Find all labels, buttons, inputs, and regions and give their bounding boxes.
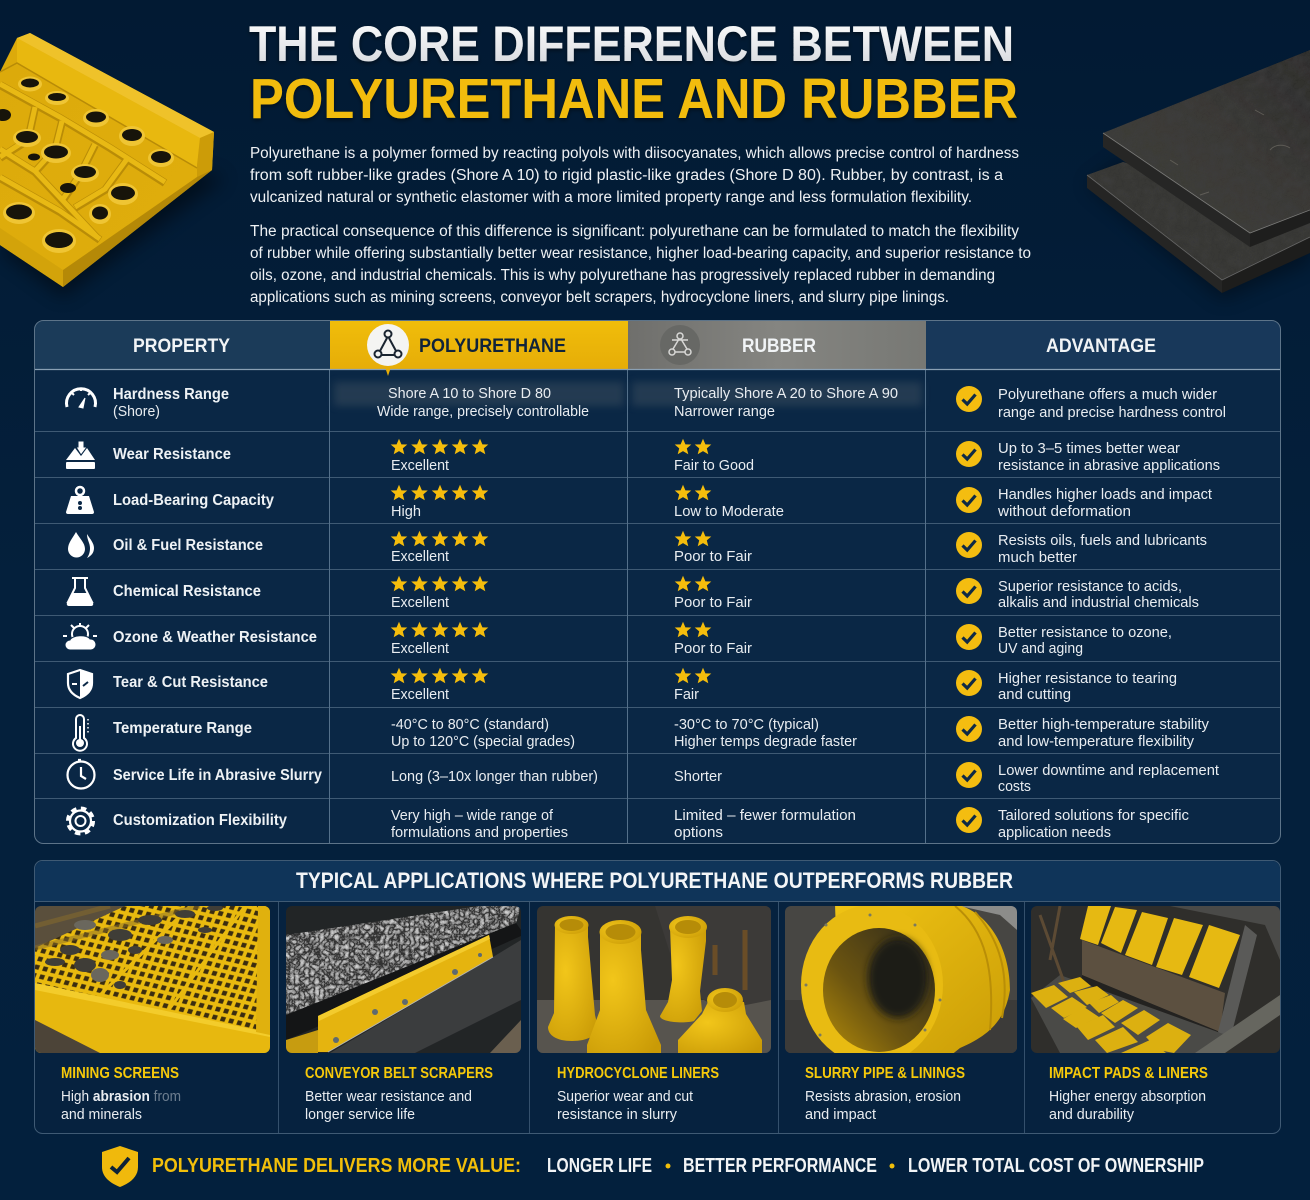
row: tear and cut resistance [68, 668, 1177, 703]
description: impact pads and liners: Higher energy absorption [1049, 1088, 1206, 1105]
row: tear and cut resistance: and cutting [998, 686, 1071, 703]
footer banner: POLYURETHANE DELIVERS MORE VALUE: [152, 1155, 521, 1177]
row: chemical resistance: Excellent [391, 594, 450, 611]
image: conveyor scraper [286, 906, 521, 1053]
row: ozone and weather resistance: UV and aging [998, 640, 1083, 657]
icon: clock [68, 760, 94, 788]
image: slurry pipe [785, 904, 1017, 1065]
row: temperature range: and low-temperature flexibility [998, 733, 1194, 750]
row: chemical resistance: Superior resistance to acids, [998, 578, 1182, 595]
row: tear and cut resistance: Tear & Cut Resistance [113, 674, 268, 691]
row: oil and fuel resistance: Excellent [391, 548, 450, 565]
row: service life in abrasive slurry: Shorter [674, 768, 722, 785]
row: chemical resistance: Chemical Resistance [113, 583, 261, 600]
row: hardness range: Hardness Range [113, 386, 229, 403]
footer banner [102, 1146, 1204, 1187]
image: mining screen [35, 905, 270, 1053]
row: customization flexibility: Very high – wide range of [391, 807, 554, 824]
row: oil and fuel resistance: Poor to Fair [674, 548, 752, 565]
table header row: RUBBER [742, 336, 816, 357]
description: impact pads and liners: and durability [1049, 1106, 1134, 1123]
text block: introduction paragraph one [250, 145, 1019, 206]
row: temperature range: -40°C to 80°C (standard) [391, 716, 549, 733]
row: load-bearing capacity: Load-Bearing Capacity [113, 492, 274, 509]
description: slurry pipe and linings: and impact [805, 1106, 877, 1123]
icon: thermometer [73, 715, 88, 751]
text block: introduction paragraph two: The practical consequence of this difference is significant: polyurethane can be formulated to match the flexibility [250, 223, 1019, 240]
icon: sun and cloud [63, 623, 97, 650]
table header row: POLYURETHANE [419, 336, 566, 357]
description: impact pads and liners [1049, 1088, 1206, 1123]
row: hardness range: range and precise hardness control [998, 404, 1226, 421]
row: chemical resistance: Poor to Fair [674, 594, 752, 611]
footer banner: BETTER PERFORMANCE [683, 1155, 877, 1177]
description: hydrocyclone liners: resistance in slurry [557, 1106, 677, 1123]
table header row: PROPERTY [133, 336, 230, 357]
row: oil and fuel resistance: Resists oils, fuels and lubricants [998, 532, 1207, 549]
text block: introduction paragraph one: Polyurethane is a polymer formed by reacting polyols with diisocyanates, which allows precise control of hardness [250, 145, 1019, 162]
row: service life in abrasive slurry: Long (3–10x longer than rubber) [391, 768, 598, 785]
row: wear resistance: Up to 3–5 times better wear [998, 440, 1180, 457]
row: service life in abrasive slurry: Lower downtime and replacement [998, 762, 1220, 779]
description: conveyor belt scrapers: Better wear resistance and [305, 1088, 472, 1105]
description: mining screens [61, 1088, 181, 1123]
row: hardness range: Polyurethane offers a much wider [998, 386, 1217, 403]
row: customization flexibility: Customization Flexibility [113, 812, 287, 829]
row: customization flexibility: Tailored solutions for specific [998, 807, 1189, 824]
row: load-bearing capacity: Handles higher loads and impact [998, 486, 1213, 503]
row: ozone and weather resistance: Ozone & Weather Resistance [113, 629, 317, 646]
row: oil and fuel resistance [68, 531, 1207, 566]
row: temperature range: Up to 120°C (special grades) [391, 733, 575, 750]
icon: gauge [66, 388, 96, 408]
description: conveyor belt scrapers [305, 1088, 472, 1123]
row: chemical resistance: alkalis and industrial chemicals [998, 594, 1199, 611]
row: wear resistance [66, 439, 1220, 474]
row: customization flexibility: Limited – fewer formulation [674, 807, 856, 824]
row: temperature range: Temperature Range [113, 720, 252, 737]
row: customization flexibility [68, 807, 1189, 841]
icon: gear [68, 808, 93, 834]
text block: introduction paragraph one: vulcanized natural or synthetic elastomer with a more limited property range and less formulation flexibility. [250, 189, 972, 206]
row: temperature range: Better high-temperature stability [998, 716, 1209, 733]
description: slurry pipe and linings [805, 1088, 961, 1123]
upper pads [1080, 906, 1240, 988]
row: wear resistance: Excellent [391, 457, 450, 474]
row: wear resistance: resistance in abrasive applications [998, 457, 1220, 474]
row: oil and fuel resistance: much better [998, 549, 1077, 566]
description: mining screens: and minerals [61, 1106, 142, 1123]
panel: comparison table [34, 320, 1281, 844]
row: service life in abrasive slurry [68, 760, 1220, 795]
row: oil and fuel resistance: Oil & Fuel Resistance [113, 537, 263, 554]
row: hardness range: (Shore) [113, 403, 160, 420]
footer banner: LONGER LIFE [547, 1155, 652, 1177]
row: wear resistance: Fair to Good [674, 457, 754, 474]
row: wear resistance: Wear Resistance [113, 446, 231, 463]
icon: flask [67, 578, 93, 606]
row: load-bearing capacity: Low to Moderate [674, 503, 784, 520]
row: customization flexibility: formulations and properties [391, 824, 568, 841]
description: hydrocyclone liners [557, 1088, 694, 1123]
text block: introduction paragraph two: oils, ozone, and industrial chemicals. This is why polyurethane has progressively replaced rubber in demanding [250, 267, 995, 284]
text block: introduction paragraph two [250, 223, 1031, 306]
row: temperature range: Higher temps degrade faster [674, 733, 857, 750]
row: service life in abrasive slurry: Service Life in Abrasive Slurry [113, 767, 322, 784]
icon: shield check [102, 1146, 138, 1187]
description: mining screens: High abrasion from [61, 1088, 181, 1105]
icon: polyurethane molecule [367, 324, 409, 376]
icon: shield [68, 670, 92, 698]
image: black rubber sheets [1087, 50, 1310, 300]
row: hardness range: Narrower range [674, 403, 775, 420]
row: hardness range: Typically Shore A 20 to Shore A 90 [674, 385, 898, 402]
label: impact pads and liners: IMPACT PADS & LINERS [1049, 1065, 1208, 1082]
applications heading: TYPICAL APPLICATIONS WHERE POLYURETHANE OUTPERFORMS RUBBER [296, 868, 1013, 893]
icon: oil drops [68, 532, 94, 558]
row: ozone and weather resistance: Better resistance to ozone, [998, 624, 1172, 641]
row: chemical resistance [67, 576, 1199, 611]
row: hardness range: Shore A 10 to Shore D 80 [388, 385, 551, 402]
card: mining screens [35, 905, 270, 1123]
table header row [34, 321, 1280, 370]
row: hardness range [66, 385, 1226, 421]
row: load-bearing capacity: High [391, 503, 421, 520]
table header row: ADVANTAGE [1046, 336, 1156, 357]
label: hydrocyclone liners: HYDROCYCLONE LINERS [557, 1065, 719, 1082]
description: conveyor belt scrapers: longer service life [305, 1106, 415, 1123]
title: THE CORE DIFFERENCE BETWEEN [249, 16, 1014, 72]
row: temperature range [73, 715, 1209, 751]
row: load-bearing capacity [66, 485, 1213, 520]
icon: weight [66, 487, 94, 514]
title [249, 16, 1018, 131]
text block: introduction paragraph two: applications such as mining screens, conveyor belt scrapers, hydrocyclone liners, and slurry pipe linings. [250, 289, 949, 306]
text block: introduction paragraph two: of rubber while offering substantially better wear resistance, higher load-bearing capacity, and superior resistance to [250, 245, 1031, 262]
text block: introduction paragraph one: from soft rubber-like grades (Shore A 10) to rigid plastic-like grades (Shore D 80). Rubber, by contrast, is a [250, 167, 1003, 184]
title: POLYURETHANE AND RUBBER [250, 67, 1018, 131]
panel: typical applications [34, 860, 1280, 1134]
row: tear and cut resistance: Higher resistance to tearing [998, 670, 1177, 687]
description: slurry pipe and linings: Resists abrasion, erosion [805, 1088, 961, 1105]
row: customization flexibility: application needs [998, 824, 1111, 841]
card: slurry pipe and linings [785, 904, 1017, 1123]
icon: rubber molecule [660, 325, 700, 365]
row: service life in abrasive slurry: costs [998, 778, 1031, 795]
card: hydrocyclone liners [537, 906, 771, 1123]
row: customization flexibility: options [674, 824, 723, 841]
row: hardness range: Wide range, precisely controllable [377, 403, 589, 420]
row: ozone and weather resistance [63, 622, 1172, 657]
cones [548, 916, 762, 1053]
icon: wear [66, 441, 95, 469]
footer banner: LOWER TOTAL COST OF OWNERSHIP [908, 1155, 1204, 1177]
card: impact pads and liners [1031, 906, 1280, 1123]
row: temperature range: -30°C to 70°C (typical) [674, 716, 819, 733]
image: yellow polyurethane block [0, 33, 225, 297]
row: load-bearing capacity: without deformation [997, 503, 1131, 520]
description: hydrocyclone liners: Superior wear and cut [557, 1088, 694, 1105]
row: tear and cut resistance: Excellent [391, 686, 450, 703]
row: ozone and weather resistance: Poor to Fair [674, 640, 752, 657]
lower pads [1031, 977, 1191, 1053]
label: conveyor belt scrapers: CONVEYOR BELT SCRAPERS [305, 1065, 493, 1082]
row: tear and cut resistance: Fair [674, 686, 699, 703]
image: impact pads [1031, 906, 1280, 1053]
image: hydrocyclone cones [537, 906, 771, 1053]
label: mining screens: MINING SCREENS [61, 1065, 179, 1082]
label: slurry pipe and linings: SLURRY PIPE & LININGS [805, 1065, 965, 1082]
row: ozone and weather resistance: Excellent [391, 640, 450, 657]
card: conveyor belt scrapers [286, 906, 521, 1123]
